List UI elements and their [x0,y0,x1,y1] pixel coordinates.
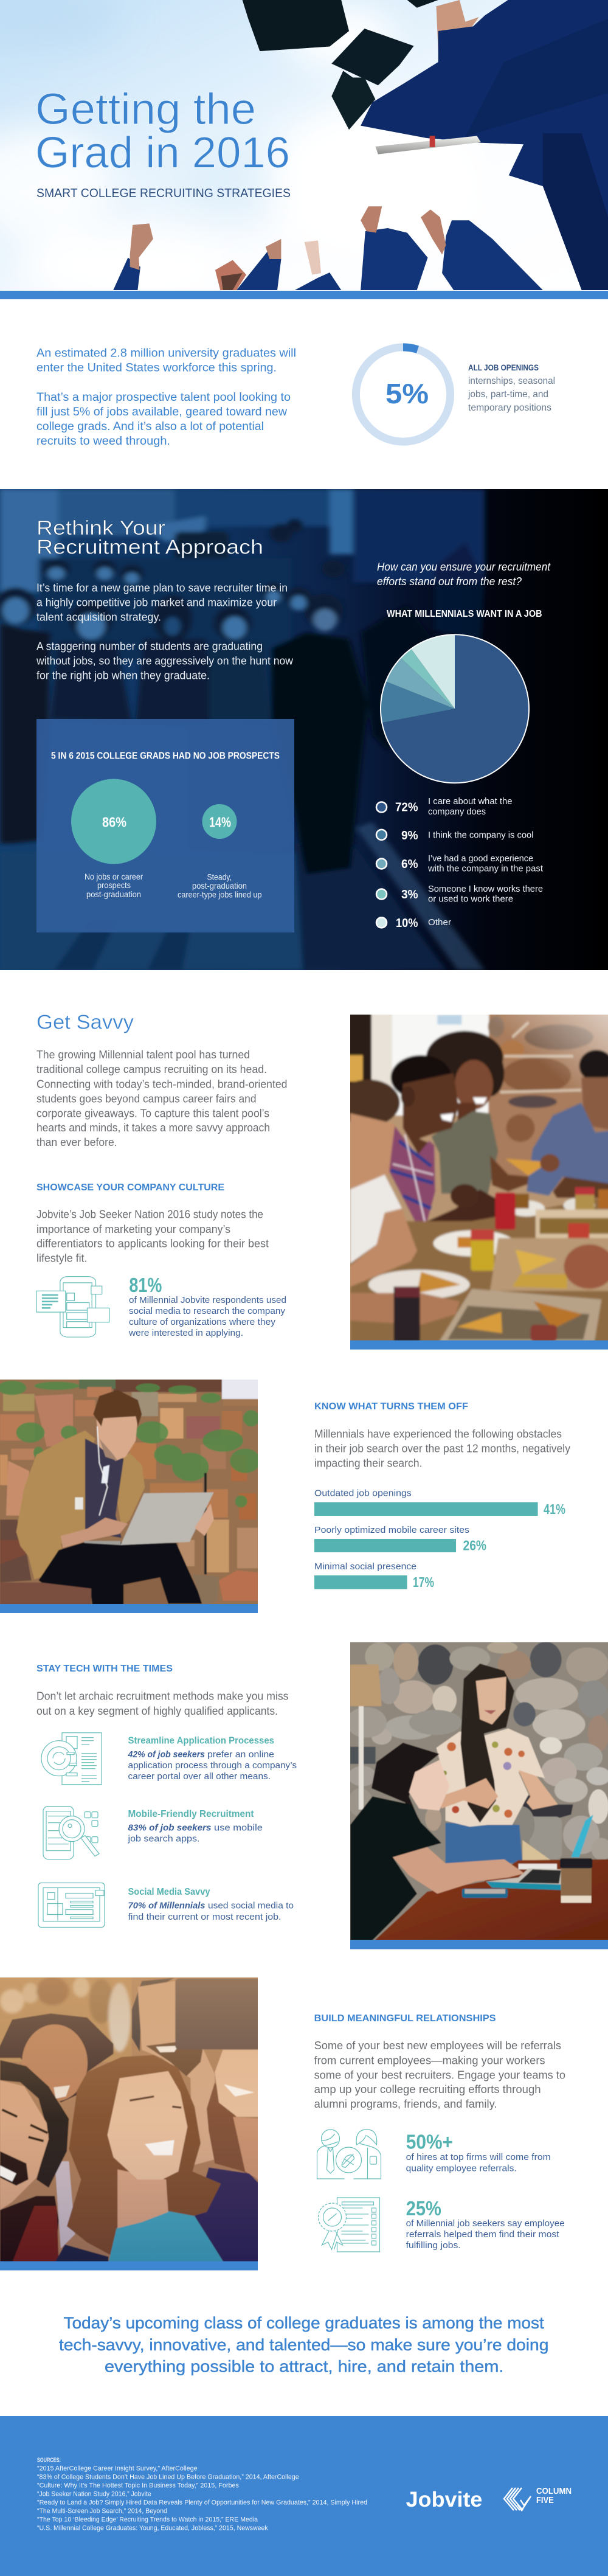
sources list: “2015 AfterCollege Career Insight Survey,” AfterCollege [37,2465,198,2473]
sources list: “The Multi-Screen Job Search,” 2014, Beyond [37,2508,167,2515]
legend: 6%: I’ve had a good experience [428,853,533,864]
relationships body text [314,2040,565,2110]
blue band under pizza photo [350,1341,608,1350]
rethink body text: without jobs, so they are aggressively on the hunt now [36,654,294,667]
subheading: showcase culture: SHOWCASE YOUR COMPANY CULTURE [36,1182,224,1193]
stat: 81%: 81% [129,1274,162,1296]
stat: 81%: were interested in applying. [128,1328,243,1338]
icon: tablet with social feed [38,1883,105,1927]
rethink body text [36,582,294,681]
intro text: enter the United States workforce this spring. [36,362,277,375]
icon: two employees with chain link [317,2130,381,2179]
stat: 50%+: of hires at top firms will come from [406,2152,551,2162]
feature: streamline application: Streamline Application Processes [128,1736,274,1746]
stat: 25%: referrals helped them find their most [406,2229,560,2240]
bubble caption: 86%: No jobs or career [85,872,143,881]
legend: 10%: Other [428,917,451,928]
rethink body text: a highly competitive job market and maximize your [36,596,277,608]
bubble caption: 14%: Steady, [207,872,232,881]
feature: streamline application: 42% of job seekers [128,1749,205,1760]
bubble caption: 14%: post-graduation [192,881,247,890]
photo: friends taking a selfie [0,1977,261,2265]
legend: 72%: company does [428,807,486,817]
icon: award ribbon and checklist [319,2198,379,2252]
closing statement: tech-savvy, innovative, and talented—so make sure you’re doing [59,2336,548,2354]
photo: two women at a laptop [346,1640,608,1942]
showcase body text [36,1209,269,1264]
logo: Column Five: FIVE [536,2495,554,2505]
rethink body text: A staggering number of students are graduating [36,640,263,652]
feature: social media savvy [128,1887,294,1922]
question callout: efforts stand out from the rest? [377,575,522,588]
stat: 25% [406,2197,565,2251]
dark crowd photo background [0,489,608,970]
stat: 50%+: quality employee referrals. [406,2164,517,2174]
showcase body text: differentiators to applicants looking for their best [36,1237,269,1249]
legend: 6% [376,853,544,874]
rethink body text: for the right job when they graduate. [36,669,210,681]
footer band [0,2416,608,2576]
closing statement: Today’s upcoming class of college graduates is among the most [64,2314,544,2332]
bar: poorly optimized mobile career sites: Poorly optimized mobile career sites [314,1525,469,1535]
bubble: 14%: 14% [209,814,231,830]
relationships body text: alumni programs, friends, and family. [314,2098,497,2110]
legend: 6%: 6% [401,858,418,871]
title [35,85,290,178]
get savvy body text: Connecting with today’s tech-minded, brand-oriented [36,1078,287,1090]
bar: poorly optimized mobile career sites [314,1525,486,1554]
photo: friends sharing pizza [337,1010,608,1348]
feature: mobile-friendly recruitment: job search apps. [127,1834,199,1844]
stat: 25%: 25% [406,2197,441,2220]
feature: mobile-friendly recruitment: 83% of job seekers [128,1822,212,1833]
donut caption: temporary positions [468,403,551,413]
bubble caption: 86%: prospects [97,880,131,890]
donut chart: 5%: 5% [385,378,429,409]
bar chart: job search obstacles [314,1488,565,1590]
stat: 81%: culture of organizations where they [129,1317,276,1327]
closing statement [59,2314,548,2376]
icon: phone with magnifier [43,1807,99,1859]
sources list: “Culture: Why It’s The Hottest Topic In Business Today,” 2015, Forbes [37,2482,239,2490]
bar: outdated job openings: Outdated job openings [314,1488,412,1498]
feature: streamline application: career portal over all other means. [128,1771,271,1782]
legend: 6%: with the company in the past [427,864,544,874]
stat: 81% [128,1274,286,1338]
relationships body text: from current employees—making your workers [314,2054,545,2066]
logo: Column Five [504,2486,572,2510]
legend: 9% [376,829,534,842]
photo: man with laptop [0,1378,261,1607]
hero photo: graduates throwing caps against the sky [0,0,608,304]
stay tech body text [36,1690,288,1717]
relationships body text: some of your best recruiters. Engage your teams to [314,2069,565,2081]
bar: outdated job openings [314,1488,565,1517]
pie chart: what millennials want [381,634,529,783]
question callout: How can you ensure your recruitment [377,561,551,573]
sources list: “Ready to Land a Job? Simply Hired Data Reveals Plenty of Opportunities for New Graduates,” 2014, Simply Hired [37,2499,367,2506]
get savvy body text [36,1049,287,1148]
section heading: get savvy: Get Savvy [36,1011,134,1033]
showcase body text: importance of marketing your company’s [36,1223,230,1235]
legend: 3%: Someone I know works there [428,884,543,894]
bar: outdated job openings: 41% [544,1501,565,1517]
bubble caption: 86%: post-graduation [86,889,141,899]
donut caption: ALL JOB OPENINGS [468,363,539,372]
bubble caption: 86% [85,872,143,899]
panel: 5 in 6 grads [36,719,294,932]
stat: 25%: fulfilling jobs. [406,2240,461,2251]
section heading: rethink: Rethink Your [36,516,165,539]
legend: 10% [376,917,451,930]
icon: phone with chat bubbles [36,1277,109,1337]
blue band under selfie photo [0,2262,258,2270]
turn-offs body text: Millennials have experienced the following obstacles [314,1428,562,1440]
legend: 72%: 72% [395,801,418,814]
logo: Column Five: COLUMN [536,2486,572,2496]
bar: poorly optimized mobile career sites: 26% [463,1538,486,1554]
bubble caption: 14%: career-type jobs lined up [178,889,262,899]
bar: minimal social presence [314,1561,434,1590]
donut caption [468,363,555,413]
intro text: recruits to weed through. [36,435,170,448]
bar: minimal social presence: 17% [413,1574,434,1590]
intro text: college grads. And it’s also a lot of potential [36,420,264,433]
relationships body text: Some of your best new employees will be referrals [314,2040,561,2052]
feature: streamline application [128,1736,297,1782]
panel heading: 5 IN 6 2015 COLLEGE GRADS HAD NO JOB PROSPECTS [51,751,280,761]
donut caption: jobs, part-time, and [468,389,548,400]
stat: 81%: of Millennial Jobvite respondents used [129,1295,286,1305]
stay tech body text: Don’t let archaic recruitment methods make you miss [36,1690,288,1703]
stat: 81%: social media to research the company [129,1306,285,1316]
sources list: “Job Seeker Nation Study 2016,” Jobvite [37,2490,151,2498]
sources list: “U.S. Millennial College Graduates: Young, Educated, Jobless,” 2015, Newsweek [37,2525,268,2532]
get savvy body text: corporate giveaways. To capture this talent pool’s [36,1108,269,1120]
section heading: rethink [36,516,263,558]
bubble caption: 14% [178,872,262,899]
feature: social media savvy: 70% of Millennials [128,1900,206,1911]
subheading: relationships: BUILD MEANINGFUL RELATIONSHIPS [314,2013,496,2024]
sources list [37,2457,367,2532]
showcase body text: lifestyle fit. [36,1252,88,1264]
legend: 10%: 10% [396,917,418,930]
donut caption: internships, seasonal [468,376,555,386]
get savvy body text: hearts and minds, it takes a more savvy approach [36,1122,270,1134]
feature: streamline application: prefer an online [207,1749,274,1760]
intro text [36,347,296,448]
legend: 9%: 9% [401,829,418,842]
section heading: rethink: Recruitment Approach [36,536,263,558]
get savvy body text: The growing Millennial talent pool has turned [36,1049,250,1061]
chart heading: WHAT MILLENNIALS WANT IN A JOB [387,609,542,619]
bar: minimal social presence: Minimal social presence [314,1561,416,1572]
subheading: stay tech: STAY TECH WITH THE TIMES [36,1664,173,1674]
legend: 3%: or used to work there [428,894,513,904]
legend: 9%: I think the company is cool [428,830,534,841]
donut chart: 5% [356,347,451,442]
blue band under man photo [0,1604,258,1613]
feature: streamline application: application process through a company’s [128,1760,297,1771]
turn-offs body text: impacting their search. [314,1457,422,1470]
turn-offs body text [314,1428,570,1470]
icon: application form with refresh [41,1733,102,1785]
rethink body text: talent acquisition strategy. [36,611,161,623]
closing statement: everything possible to attract, hire, and retain them. [105,2358,503,2376]
sources list: “83% of College Students Don’t Have Job Lined Up Before Graduation,” 2014, AfterCollege [37,2474,299,2481]
subheading: turn-offs: KNOW WHAT TURNS THEM OFF [314,1401,468,1412]
turn-offs body text: in their job search over the past 12 months, negatively [314,1443,570,1455]
title: Grad in 2016 [35,129,290,178]
stay tech body text: out on a key segment of highly qualified applicants. [36,1705,278,1717]
bubble: 86%: 86% [102,814,126,830]
rethink body text: It’s time for a new game plan to save recruiter time in [36,582,288,594]
showcase body text: Jobvite’s Job Seeker Nation 2016 study notes the [36,1209,263,1221]
get savvy body text: traditional college campus recruiting on its head. [36,1063,267,1075]
legend: 3%: 3% [401,888,418,901]
get savvy body text: students goes beyond campus career fairs and [36,1092,257,1105]
bubble: 14% [202,804,237,839]
sources list: “The Top 10 ‘Bleeding Edge’ Recruiting Trends to Watch in 2015,” ERE Media [37,2516,258,2523]
intro text: fill just 5% of jobs available, geared toward new [36,406,287,418]
relationships body text: amp up your college recruiting efforts through [314,2083,541,2095]
feature: social media savvy: find their current or most recent job. [128,1912,281,1922]
stat: 25%: of Millennial job seekers say employee [406,2218,565,2229]
stat: 50%+: 50%+ [406,2131,453,2153]
intro text: An estimated 2.8 million university graduates will [36,347,296,360]
legend: 72% [376,796,512,817]
hero blue band [0,291,608,299]
feature: mobile-friendly recruitment: use mobile [214,1822,263,1833]
blue band under women photo [350,1940,608,1949]
feature: mobile-friendly recruitment: Mobile-Friendly Recruitment [128,1809,254,1819]
legend: 72%: I care about what the [428,796,512,807]
title: Getting the [35,85,256,134]
get savvy body text: than ever before. [36,1136,117,1148]
bubble: 86% [71,779,156,864]
subtitle: SMART COLLEGE RECRUITING STRATEGIES [36,187,291,200]
question callout [377,561,551,588]
logo: Jobvite: Jobvite [406,2488,482,2512]
feature: social media savvy: Social Media Savvy [128,1887,210,1897]
legend: 3% [376,884,543,904]
intro text: That’s a major prospective talent pool looking to [36,391,291,404]
feature: mobile-friendly recruitment [127,1809,263,1844]
sources list: SOURCES: [37,2457,61,2463]
stat: 50%+ [406,2131,551,2174]
feature: social media savvy: used social media to [208,1900,294,1911]
